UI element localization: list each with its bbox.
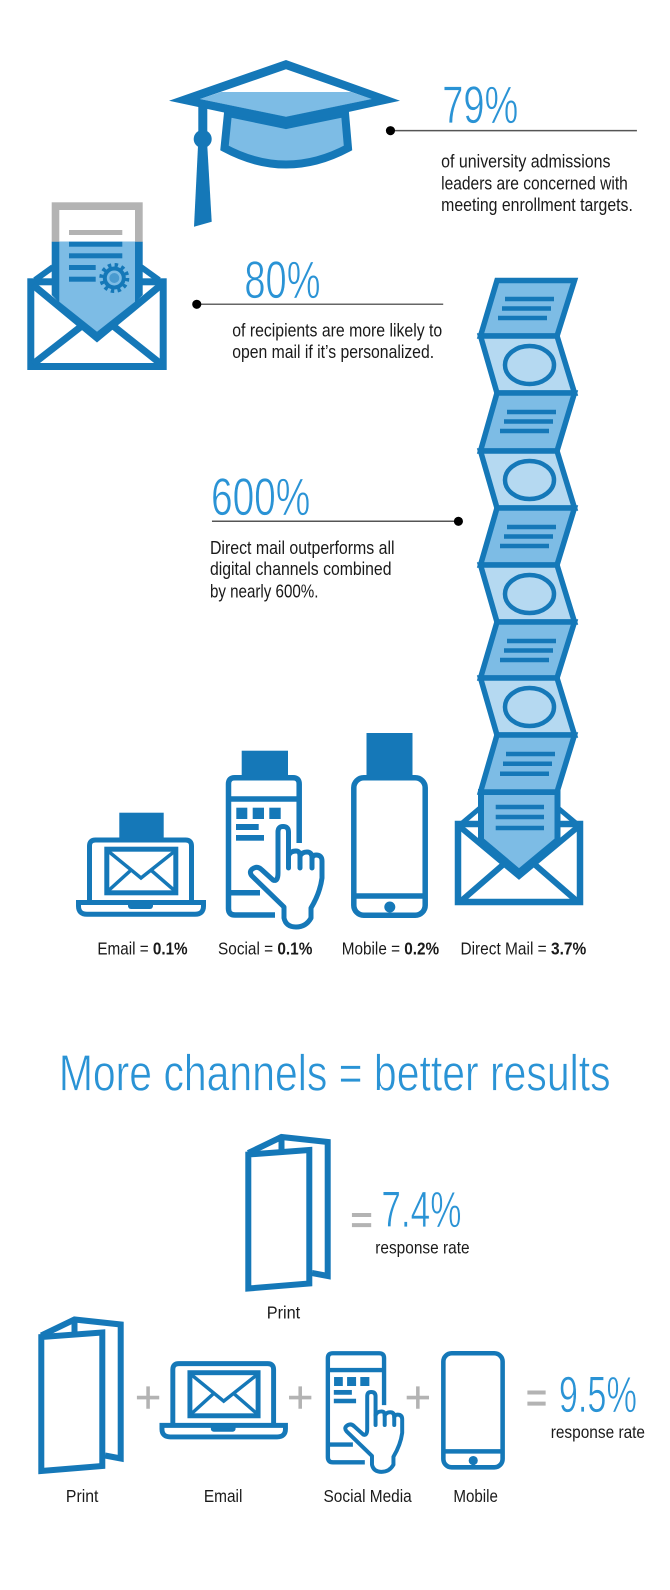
icon: print brochure small [41,1318,121,1471]
bottom labels: Email [204,1486,242,1506]
bottom labels: Mobile [453,1486,498,1506]
bottom labels: Print [66,1486,98,1506]
stat: 79%: meeting enrollment targets. [441,194,633,215]
stat: 80%: of recipients are more likely to [232,320,442,341]
icon: mobile phone [353,733,426,915]
channel labels: Mobile = 0.2% [342,938,439,958]
icon: print brochure [248,1136,328,1288]
label: print: Print [267,1302,300,1322]
stat: 80%: open mail if it’s personalized. [232,341,434,362]
stat: 80% [192,251,443,362]
stat: 600%: by nearly 600%. [210,580,318,601]
icon: social phone small [327,1353,402,1472]
stat: print response rate [352,1181,470,1258]
icon: laptop small [162,1364,285,1437]
icon: email laptop [78,813,204,914]
stat: combined response rate: response rate [551,1422,645,1442]
bottom labels: Social Media [324,1486,412,1506]
stat: 79%: of university admissions [441,150,611,171]
icon: mobile small [443,1353,503,1467]
stat: 600% [210,468,463,601]
stat: 600%: Direct mail outperforms all [210,537,395,558]
stat: combined response rate [527,1366,645,1442]
channel labels: Email = 0.1% [97,938,188,958]
channel labels: Direct Mail = 3.7% [460,938,586,958]
stat: 79%: leaders are concerned with [441,173,628,194]
channel labels: Social = 0.1% [218,938,313,958]
icon: graduation cap [169,60,400,227]
stat: 79% [386,76,637,215]
stat: 80%: 80% [244,251,320,310]
stat: 79%: 79% [442,76,518,135]
channel labels [97,938,586,958]
icon: social phone with hand [228,751,322,927]
stat: 600%: 600% [211,468,310,527]
stat: print response rate: response rate [375,1238,470,1258]
icon: direct mail envelope with folded strip [458,280,580,902]
stat: print response rate: 7.4% [381,1181,461,1238]
plus signs [137,1386,429,1409]
bottom labels [66,1486,498,1506]
icon: envelope with personalized letter [31,202,163,366]
stat: 600%: digital channels combined [210,558,391,579]
